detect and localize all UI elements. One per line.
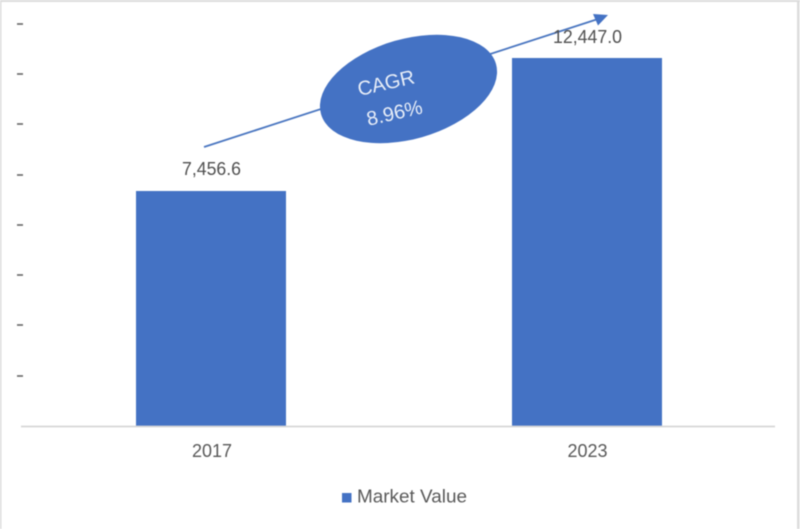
legend: market value: Market Value [357,486,467,506]
value label: 2023: 12,447.0 [553,27,622,47]
axis label: 2017: 2017 [192,441,232,461]
y axis tick marks [17,24,23,376]
value label: 2017: 7,456.6 [182,159,241,179]
callout: CAGR ellipse: 8.96% [365,97,425,131]
callout: CAGR ellipse [307,16,510,162]
bar: 2023 [512,58,662,426]
callout: CAGR ellipse: CAGR [356,66,417,101]
axis label: 2023: 2023 [567,441,608,461]
bar: 2017 [136,191,286,426]
arrow: growth trend [204,14,608,147]
